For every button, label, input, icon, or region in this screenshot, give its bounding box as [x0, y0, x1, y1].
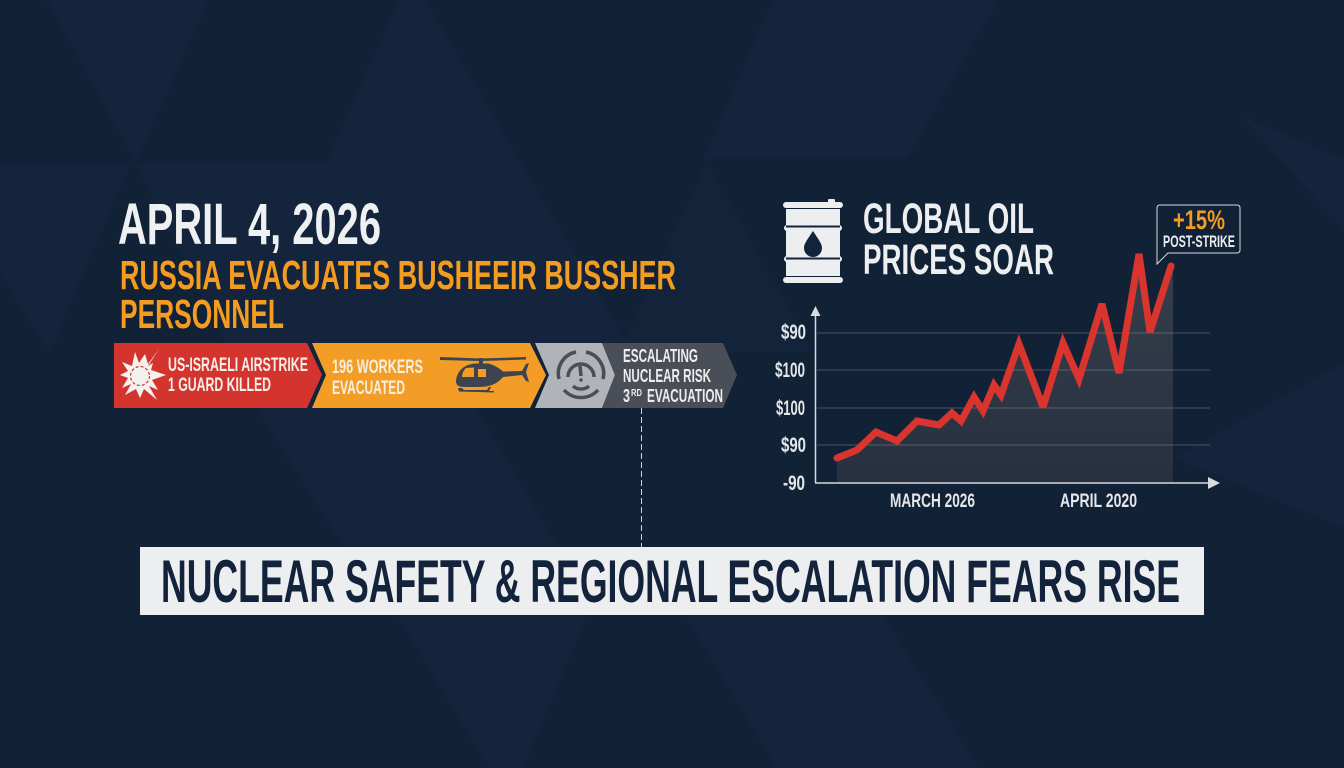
- y axis labels: $100: [776, 397, 805, 420]
- segment: escalating nuclear risk: NUCLEAR RISK: [623, 366, 711, 386]
- segment: airstrike: [114, 343, 322, 408]
- oil heading: [863, 195, 1054, 284]
- y axis labels: -90: [783, 472, 805, 495]
- oil heading: GLOBAL OIL: [863, 195, 1034, 243]
- icon: warning signal: [558, 352, 604, 398]
- segment: escalating nuclear risk: RD: [631, 388, 642, 399]
- chart area fill: [837, 254, 1173, 482]
- dashed connector: [640, 408, 642, 547]
- headline: Russia evacuates personnel: [120, 252, 676, 337]
- segment: escalating nuclear risk: 3: [623, 386, 630, 406]
- segment: airstrike: 1 GUARD KILLED: [168, 375, 271, 396]
- segment: workers evacuated: EVACUATED: [332, 378, 405, 399]
- x axis labels: [890, 491, 1137, 512]
- price line: [837, 254, 1171, 458]
- callout: +15% post-strike: POST-STRIKE: [1163, 232, 1235, 251]
- grid lines: [817, 333, 1210, 445]
- y axis labels: $100: [775, 359, 805, 382]
- segment: escalating nuclear risk: ESCALATING: [623, 346, 698, 366]
- y axis labels: [775, 321, 806, 495]
- segment: nuclear risk icon: [535, 343, 615, 408]
- axes: [810, 306, 1220, 489]
- icon: oil barrel: [783, 199, 843, 283]
- oil heading: PRICES SOAR: [863, 236, 1054, 284]
- date heading: APRIL 4, 2026: [118, 192, 381, 257]
- segment: airstrike: US-ISRAELI AIRSTRIKE: [168, 355, 308, 376]
- icon: helicopter: [440, 357, 529, 392]
- y axis labels: $90: [781, 321, 806, 344]
- icon: explosion: [120, 349, 166, 400]
- y axis labels: $90: [781, 434, 806, 457]
- segment: escalating nuclear risk: EVACUATION: [647, 386, 723, 406]
- line chart: oil prices: [775, 254, 1220, 512]
- callout: +15% post-strike: +15%: [1173, 205, 1225, 235]
- timeline banner: [114, 343, 737, 408]
- segment: workers evacuated: 196 WORKERS: [332, 357, 423, 378]
- segment: workers evacuated: [312, 343, 546, 408]
- headline: Russia evacuates personnel: RUSSIA EVACUATES BUSHEEIR BUSSHER: [120, 252, 676, 298]
- headline: Russia evacuates personnel: PERSONNEL: [120, 291, 284, 337]
- x axis labels: APRIL 2020: [1060, 491, 1137, 512]
- segment: escalating nuclear risk: [602, 343, 737, 408]
- callout: +15% post-strike: [1157, 205, 1240, 264]
- x axis labels: MARCH 2026: [890, 491, 975, 512]
